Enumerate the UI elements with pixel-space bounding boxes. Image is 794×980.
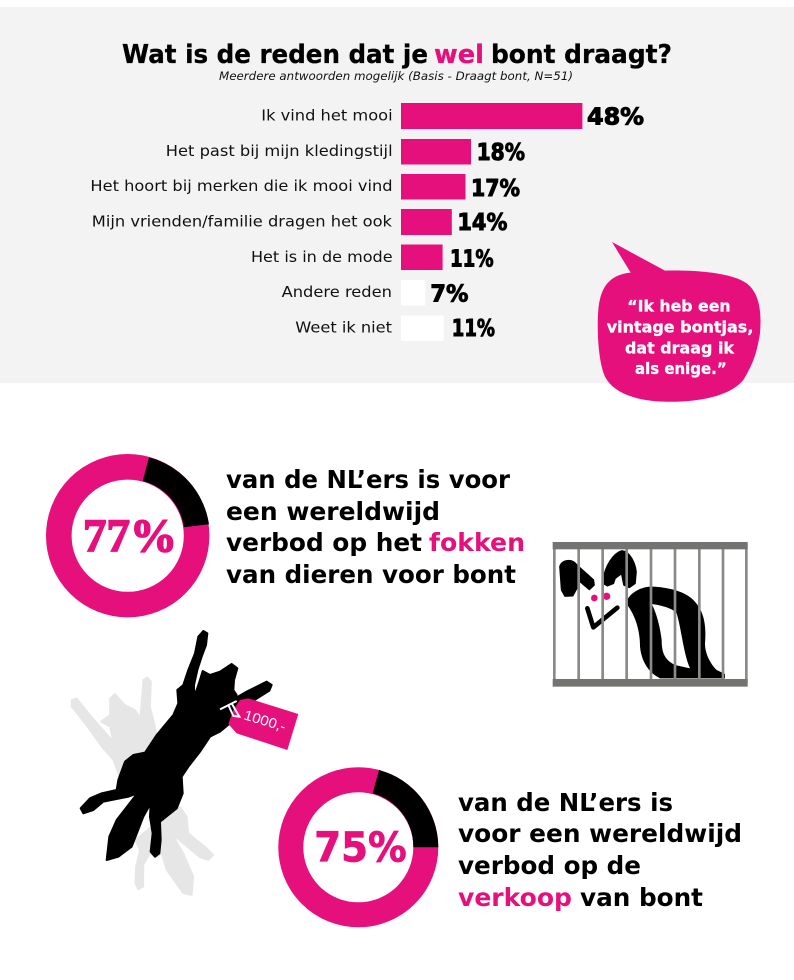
price tag [220, 698, 298, 750]
text block: ban on sales: verkoop [458, 883, 572, 912]
callout: speech bubble quote: vintage bontjas, [607, 318, 753, 337]
bar row: Andere reden 7% [282, 280, 468, 308]
text block: ban on sales: voor een wereldwijd [458, 819, 742, 848]
bar chart [90, 103, 644, 342]
bar row: Het past bij mijn kledingstijl 18%: 18% [477, 140, 525, 166]
bar row: Het past bij mijn kledingstijl 18% [166, 139, 525, 166]
donut chart: 75%: 75% [314, 824, 407, 872]
bar row: Het is in de mode 11%: Het is in de mode [251, 248, 393, 266]
bar row: Het is in de mode 11% [251, 244, 494, 273]
text block: ban on breeding: van de NL’ers is voor [226, 465, 511, 494]
title [122, 40, 672, 70]
title: bont draagt? [491, 40, 672, 70]
text block: ban on breeding: verbod op het [226, 528, 422, 557]
bar row: Het is in de mode 11%: 11% [450, 247, 494, 273]
callout: speech bubble quote [598, 242, 761, 402]
bar row: Het hoort bij merken die ik mooi vind 17%: 17% [471, 176, 520, 202]
text block: ban on sales [458, 788, 742, 912]
bar row: Mijn vrienden/familie dragen het ook 14%: Mijn vrienden/familie dragen het ook [92, 213, 392, 231]
bar row: Andere reden 7%: Andere reden [282, 283, 392, 301]
text block: ban on breeding: een wereldwijd [226, 497, 440, 526]
bar row: Weet ik niet 11%: Weet ik niet [295, 319, 392, 337]
title: Wat is de reden dat je [122, 40, 428, 70]
bar row: Ik vind het mooi 48%: 48% [587, 104, 644, 130]
bar row: Mijn vrienden/familie dragen het ook 14%: 14% [457, 210, 507, 236]
bar row: Het past bij mijn kledingstijl 18%: Het past bij mijn kledingstijl [166, 142, 393, 160]
text block: ban on sales: verbod op de [458, 851, 641, 880]
subtitle: Meerdere antwoorden mogelijk (Basis - Draagt bont, N=51) [219, 69, 573, 83]
bar row: Mijn vrienden/familie dragen het ook 14% [92, 209, 507, 236]
title: wel [434, 40, 484, 70]
callout: speech bubble quote: als enige.” [635, 359, 727, 378]
donut chart: 75% [291, 770, 438, 915]
panel: reasons for wearing fur [0, 7, 794, 383]
bar row: Andere reden 7%: 7% [430, 282, 468, 308]
donut chart: 77% [59, 457, 209, 605]
icon: black fox with price tag [81, 631, 298, 860]
icon: fox fur shadow [72, 677, 213, 895]
text block: ban on sales: van bont [580, 883, 703, 912]
price tag: 1000,- [242, 707, 288, 735]
callout: speech bubble quote: dat draag ik [625, 338, 734, 357]
icon: animal in a cage [553, 542, 748, 687]
bar row: Weet ik niet 11% [295, 316, 495, 342]
text block: ban on breeding: van dieren voor bont [226, 560, 516, 589]
callout: speech bubble quote: “Ik heb een [627, 297, 731, 316]
bar row: Het hoort bij merken die ik mooi vind 17%: Het hoort bij merken die ik mooi vind [90, 177, 393, 195]
bar row: Ik vind het mooi 48% [261, 103, 644, 130]
bar row: Ik vind het mooi 48%: Ik vind het mooi [261, 107, 393, 125]
text block: ban on sales: van de NL’ers is [458, 788, 673, 817]
text block: ban on breeding: fokken [429, 528, 525, 557]
donut chart: 77%: 77% [83, 510, 177, 562]
bar row: Het hoort bij merken die ik mooi vind 17% [90, 174, 520, 202]
text block: ban on breeding [226, 465, 525, 589]
bar row: Weet ik niet 11%: 11% [452, 316, 495, 342]
